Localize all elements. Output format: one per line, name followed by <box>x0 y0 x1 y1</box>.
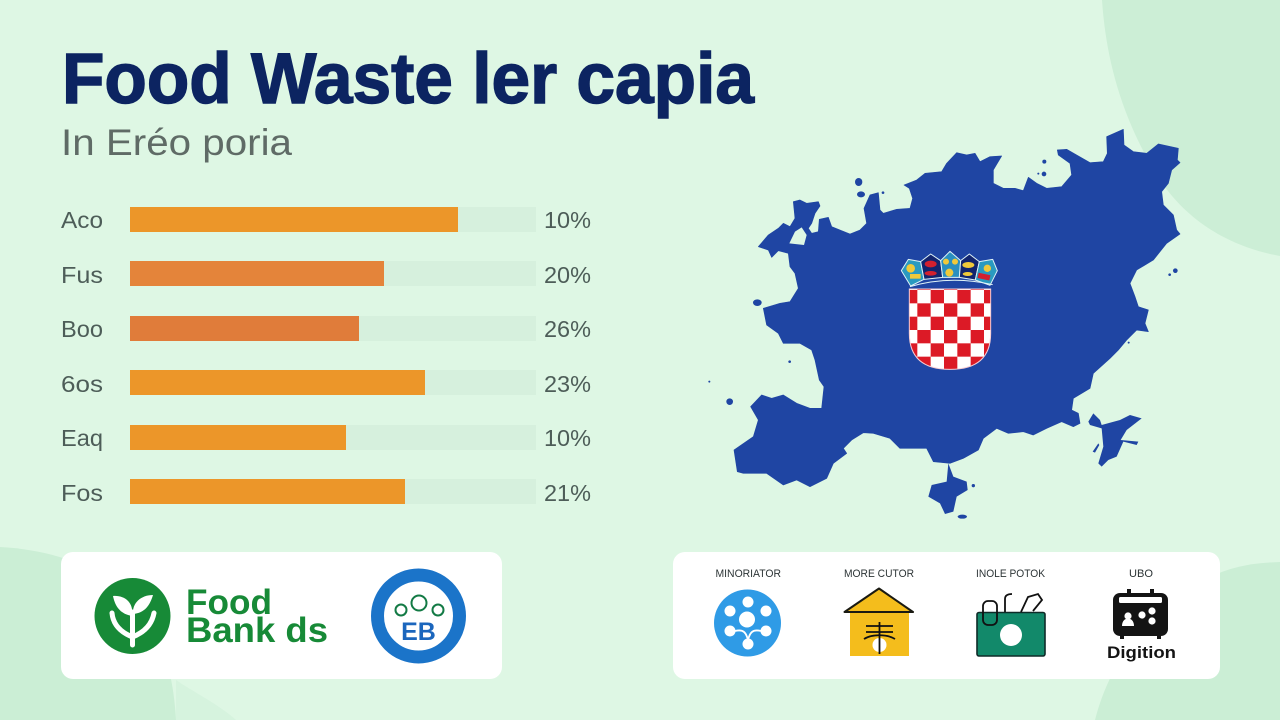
icon: inole potok folder <box>976 568 1046 656</box>
bar chart <box>61 207 591 506</box>
icon: EB badge: EB <box>401 618 436 646</box>
subtitle: In Eréo poria <box>61 122 292 163</box>
bar row: Eaq: 10% <box>544 425 591 451</box>
panel: partner logos <box>61 552 502 679</box>
icon: digition calendar <box>1107 568 1176 662</box>
shield <box>909 289 991 369</box>
bar row: Aco <box>61 207 591 233</box>
bar row: 6os <box>61 370 591 397</box>
bar row: Eaq <box>61 425 591 451</box>
icon: food bank leaf logo <box>94 578 170 654</box>
logo text: Food <box>186 583 272 622</box>
icon: digition calendar: Digition <box>1107 643 1176 662</box>
title: Food Waste ler capia <box>62 40 754 119</box>
bar row: Fos: Fos <box>61 480 103 506</box>
bar row: Fus: 20% <box>544 262 591 288</box>
icon: digition calendar: UBO <box>1129 568 1153 580</box>
bar row: Boo <box>61 316 591 342</box>
logo text <box>186 583 328 650</box>
bar row: Boo: Boo <box>61 316 103 342</box>
bar row: 6os: 23% <box>544 371 591 397</box>
bar row: Eaq: Eaq <box>61 425 103 451</box>
icon: minoriator network: MINORIATOR <box>716 568 781 580</box>
bar row: Fus <box>61 261 591 288</box>
icon: minoriator network <box>714 568 781 656</box>
bar row: Boo: 26% <box>544 316 591 342</box>
bar row: Fus: Fus <box>61 262 103 288</box>
icon: more cutor house: MORE CUTOR <box>844 568 914 580</box>
map <box>708 129 1180 519</box>
crown <box>901 251 997 287</box>
logo text: Bank ds <box>186 611 328 650</box>
icon: inole potok folder: INOLE POTOK <box>976 568 1046 580</box>
bar row: Aco: Aco <box>61 207 103 233</box>
icon: EB badge <box>378 575 460 657</box>
bar row: Aco: 10% <box>544 207 591 233</box>
icon: more cutor house <box>844 568 914 656</box>
bar row: Fos: 21% <box>544 480 591 506</box>
coat of arms <box>901 251 997 369</box>
bar row: Fos <box>61 479 591 506</box>
bar row: 6os: 6os <box>61 371 103 397</box>
panel: icon row <box>673 552 1220 679</box>
